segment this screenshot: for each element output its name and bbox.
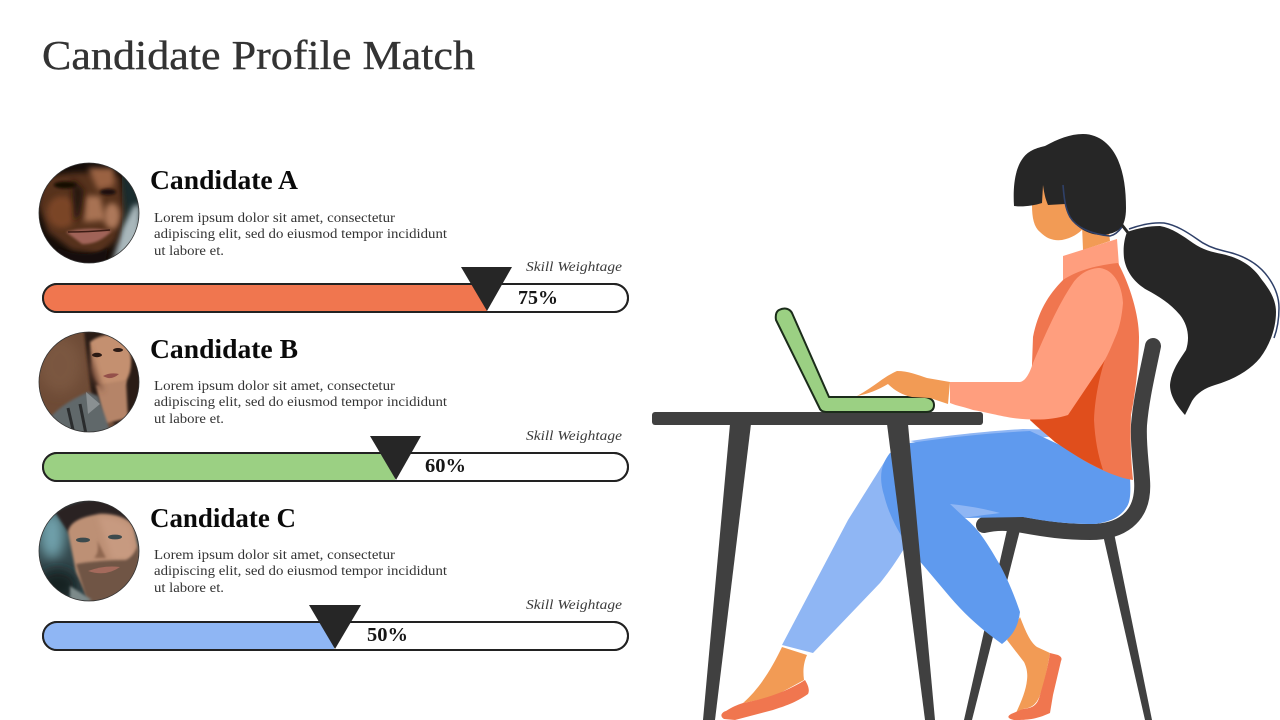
blouse [1030, 225, 1139, 480]
candidate A marker [461, 267, 512, 311]
candidate A percentage: 75% [518, 287, 558, 309]
candidate C description: Lorem ipsum dolor sit amet, consectetur [154, 548, 395, 563]
candidate C percentage: 50% [367, 624, 408, 646]
candidate B description [154, 379, 447, 427]
arm [950, 268, 1123, 420]
candidate B description: adipiscing elit, sed do eiusmod tempor incididunt [154, 395, 447, 410]
candidate B skill weightage label: Skill Weightage [526, 429, 622, 444]
candidate B percentage: 60% [425, 455, 466, 477]
title: Candidate Profile Match [42, 32, 475, 78]
candidate C description: ut labore et. [154, 581, 224, 596]
chair [964, 346, 1153, 720]
panel: candidate A [38, 162, 628, 312]
candidate C name: Candidate C [150, 503, 296, 533]
illustration: woman working on a laptop at a desk [652, 134, 1279, 720]
far leg [721, 453, 915, 720]
candidate B marker [370, 436, 421, 480]
candidate C description: adipiscing elit, sed do eiusmod tempor incididunt [154, 564, 447, 579]
near leg and trousers [881, 429, 1130, 720]
candidate C marker [309, 605, 361, 649]
candidate B description: ut labore et. [154, 412, 224, 427]
candidate C skill weightage label: Skill Weightage [526, 598, 622, 613]
panel: candidate B [38, 331, 628, 481]
candidate B description: Lorem ipsum dolor sit amet, consectetur [154, 379, 395, 394]
candidate A description: adipiscing elit, sed do eiusmod tempor incididunt [154, 227, 447, 242]
portrait: candidate B [38, 331, 142, 436]
candidate A description: Lorem ipsum dolor sit amet, consectetur [154, 211, 395, 226]
panel: candidate C [38, 500, 628, 650]
candidate A description: ut labore et. [154, 244, 224, 259]
candidate A description [154, 211, 447, 259]
candidate C progress bar [43, 622, 628, 650]
candidate B progress bar [43, 453, 628, 481]
hand [857, 371, 950, 404]
candidate B name: Candidate B [150, 334, 298, 364]
head [1014, 134, 1126, 240]
candidate A progress bar [43, 284, 628, 312]
portrait: candidate C [38, 500, 142, 606]
candidate C description [154, 548, 447, 596]
table [652, 412, 983, 720]
candidate A skill weightage label: Skill Weightage [526, 260, 622, 275]
ponytail [1122, 223, 1279, 415]
laptop [776, 309, 934, 412]
portrait: candidate A [38, 162, 140, 268]
candidate A name: Candidate A [150, 165, 298, 195]
